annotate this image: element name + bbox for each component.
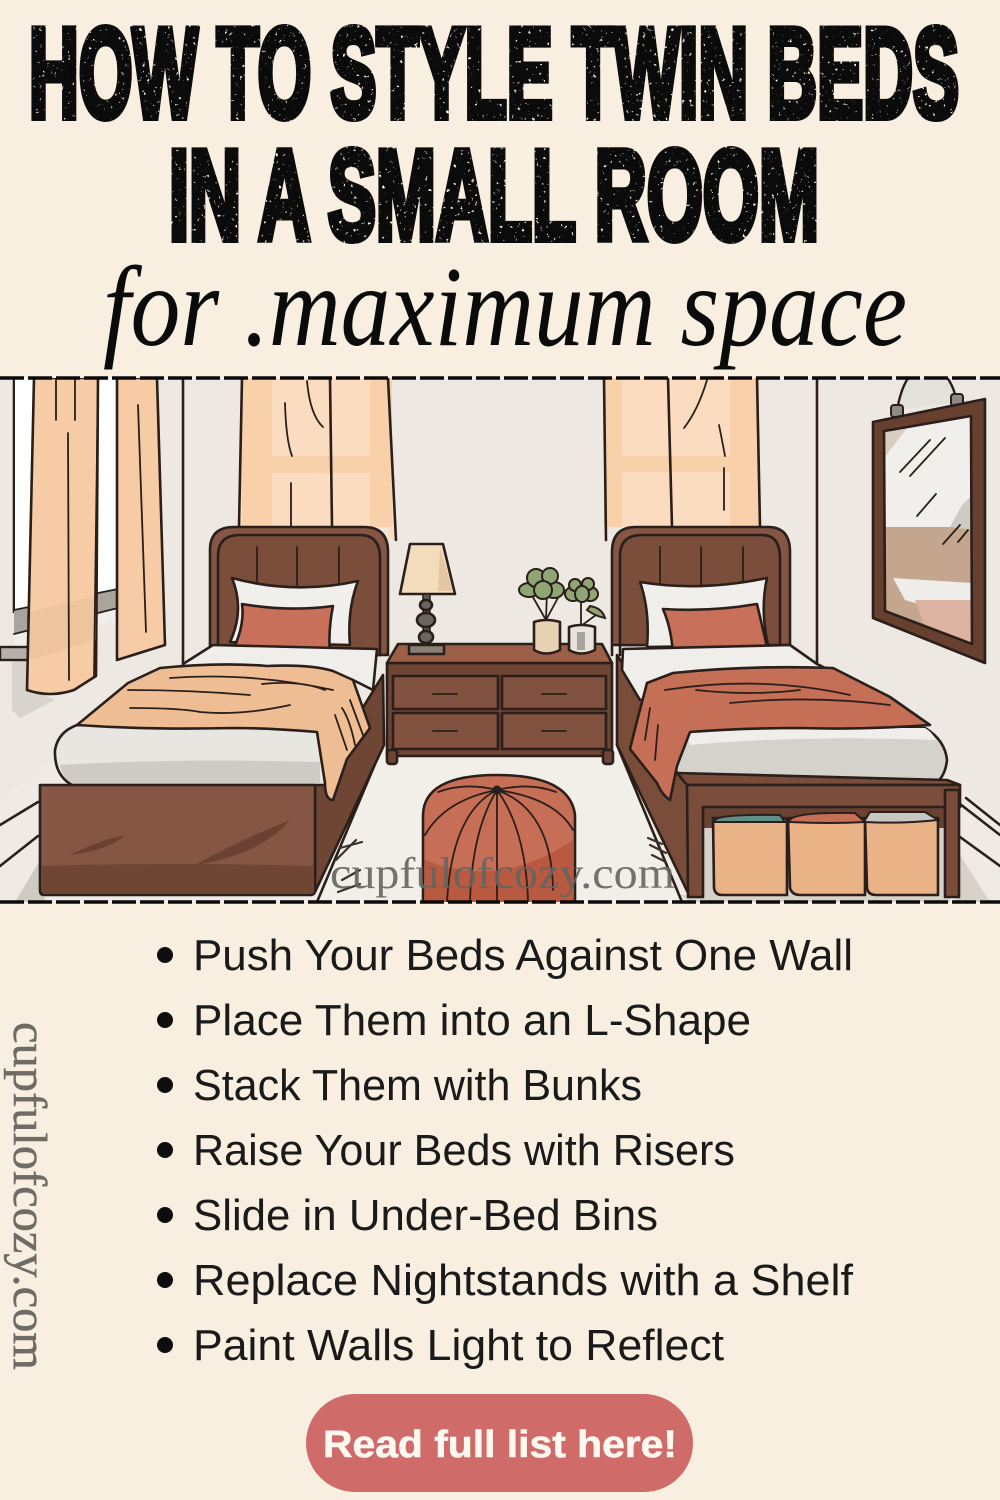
headboard (210, 527, 388, 655)
bullet list of tips: Raise Your Beds with Risers (193, 1126, 735, 1175)
bed base (40, 785, 315, 895)
mattress front (55, 725, 325, 785)
red pillow (234, 602, 334, 647)
subtitle script: for .maximum space (103, 243, 907, 370)
bullet list of tips: Stack Them with Bunks (193, 1061, 642, 1110)
red blanket (630, 667, 930, 800)
illustration: twin bedroom (0, 372, 1000, 902)
call to action button: Read full list here! (323, 1424, 677, 1466)
window behind left bed (239, 378, 396, 540)
storage bins (713, 812, 938, 895)
dashed divider bottom (0, 900, 1000, 904)
potted plants (519, 568, 605, 654)
mattress front (677, 726, 948, 779)
headboard (612, 527, 790, 655)
peach blanket (77, 664, 370, 800)
dashed divider top (0, 376, 1000, 380)
wall and floor (0, 378, 1000, 902)
left bed (40, 527, 388, 895)
bullet list of tips: Paint Walls Light to Reflect (193, 1321, 724, 1370)
bullet list of tips (157, 931, 854, 1370)
side rail (315, 675, 384, 892)
title (29, 2, 959, 266)
bullet list of tips: Slide in Under-Bed Bins (193, 1191, 658, 1240)
bullet list of tips: Place Them into an L-Shape (193, 996, 751, 1045)
pouf ottoman (423, 775, 575, 902)
mattress sheet (622, 645, 840, 700)
table lamp (400, 544, 455, 654)
red pillow (662, 602, 766, 646)
mattress sheet (183, 645, 377, 690)
window behind right bed (604, 378, 760, 540)
right bed (612, 527, 960, 898)
bullet list of tips: Push Your Beds Against One Wall (193, 931, 853, 980)
bed frame (677, 773, 960, 898)
white pillow (230, 578, 358, 645)
image watermark: cupfulofcozy.com (330, 849, 675, 898)
vertical site name: cupfulofcozy.com (3, 1022, 56, 1370)
side rail (617, 655, 700, 897)
call to action button (306, 1394, 693, 1492)
wall mirror (873, 372, 985, 663)
white pillow (640, 578, 768, 647)
nightstand (387, 644, 613, 764)
bullet list of tips: Replace Nightstands with a Shelf (193, 1256, 854, 1305)
rug fringe (336, 838, 666, 892)
left window with curtains (0, 378, 165, 694)
